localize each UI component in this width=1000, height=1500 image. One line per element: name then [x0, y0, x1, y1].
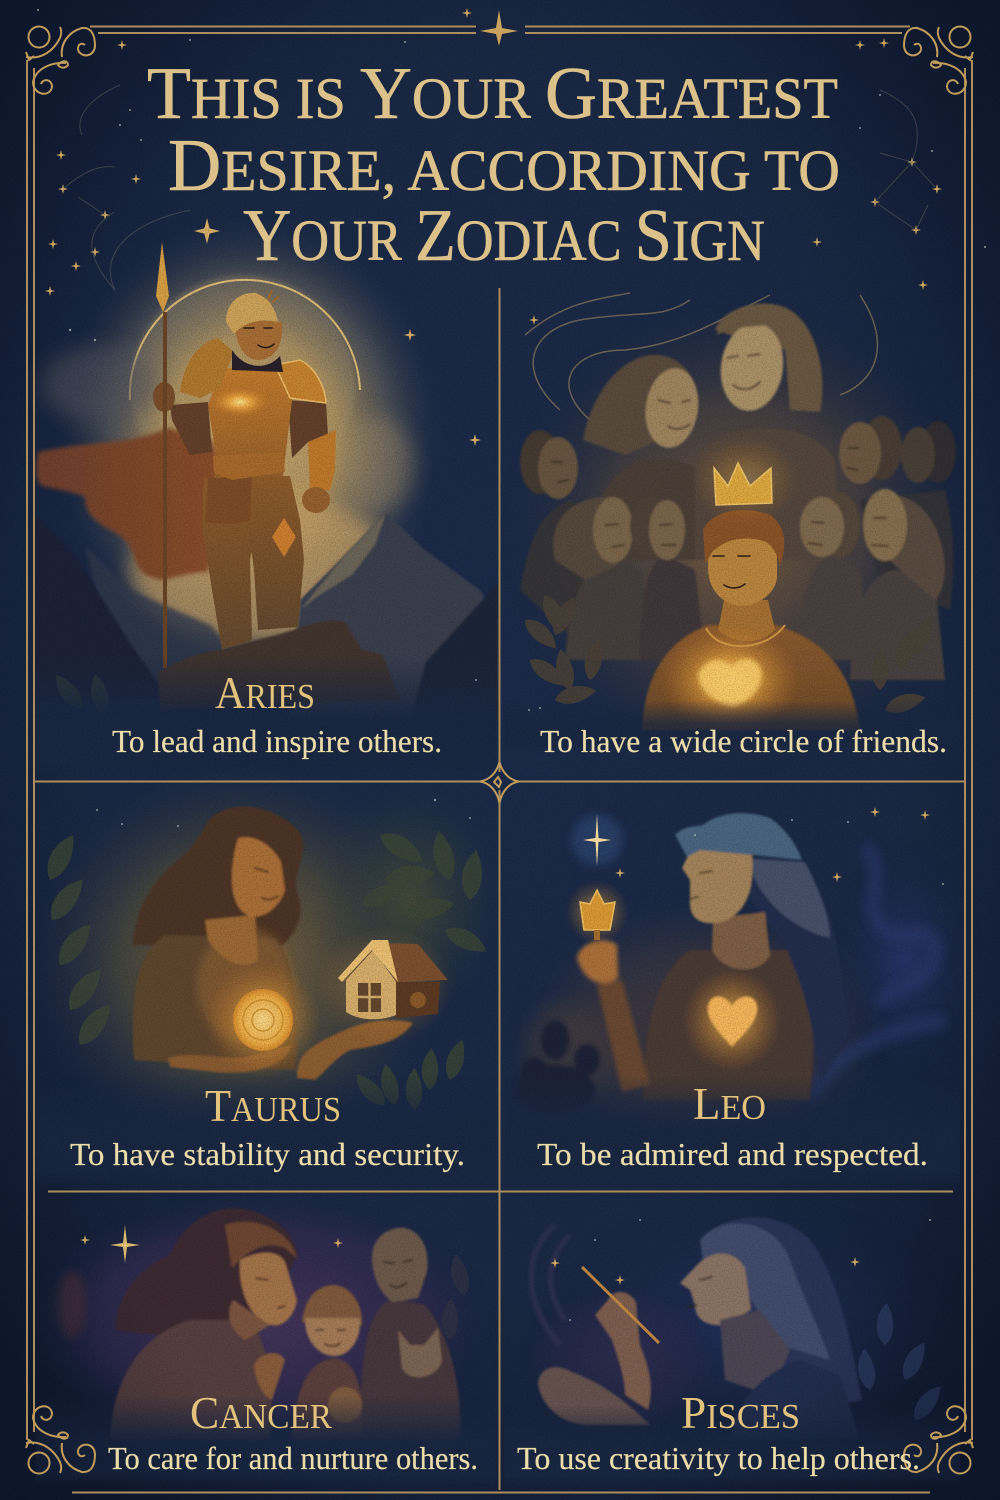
bottom fade — [505, 1405, 960, 1487]
palette fish — [538, 1367, 650, 1425]
centre diamond ornament — [480, 762, 519, 803]
label: Taurus: TAURUS — [205, 1080, 341, 1131]
label: Leo: To be admired and respected. — [537, 1136, 928, 1172]
label: Leo: LEO — [693, 1078, 766, 1129]
red leaves — [58, 1271, 86, 1339]
lower heads — [553, 489, 945, 600]
haze — [525, 840, 985, 1125]
icon: star — [571, 814, 623, 866]
spear — [156, 242, 169, 668]
corner ornament top left — [26, 26, 95, 94]
background bodies — [520, 428, 953, 680]
panel: Cancer — [25, 1190, 496, 1487]
figure in hat — [643, 813, 850, 1100]
label: Aries: ARIES — [215, 667, 315, 718]
crowd of friends — [520, 304, 956, 680]
label: Pisces: PISCES — [681, 1387, 800, 1438]
warrior cape — [36, 428, 226, 580]
corner ornament bottom right — [904, 1406, 973, 1474]
legs — [202, 476, 304, 650]
label: Cancer — [108, 1387, 478, 1476]
title — [147, 53, 840, 277]
bottom fade — [505, 1075, 960, 1187]
woman top — [583, 355, 703, 455]
panel: Taurus — [25, 760, 505, 1187]
right leaves — [440, 1252, 471, 1341]
violet glow — [520, 1190, 950, 1450]
crowned friend — [642, 510, 860, 735]
side heads — [520, 416, 956, 499]
crowd silhouette — [515, 1020, 600, 1115]
panel: friends — [500, 293, 970, 775]
woman in profile — [680, 1217, 862, 1440]
woman — [110, 1208, 297, 1440]
icon: glowing coin — [205, 962, 321, 1078]
warm glow — [500, 295, 970, 775]
corner ornament bottom left — [26, 1406, 95, 1474]
label: Aries: To lead and inspire others. — [112, 723, 442, 759]
panel: Pisces — [505, 1190, 960, 1487]
head and helmet — [226, 290, 283, 372]
bottom fade — [505, 700, 960, 748]
label: Pisces: To use creativity to help others. — [517, 1440, 920, 1476]
icon: crown — [690, 435, 800, 525]
bottom fade — [36, 655, 496, 780]
icon: glowing heart — [682, 968, 782, 1072]
label: Cancer: CANCER — [190, 1387, 333, 1438]
top centre star — [480, 10, 518, 46]
leaves lower left — [50, 670, 111, 717]
label: Taurus — [70, 1080, 465, 1172]
hand with brush — [582, 1267, 659, 1410]
warrior figure — [153, 290, 336, 650]
label: Leo — [537, 1078, 928, 1172]
family figures — [110, 1208, 460, 1440]
swirl — [531, 1225, 570, 1345]
label: Aries — [112, 667, 442, 759]
corner ornament top right — [904, 26, 973, 94]
title: YOUR ZODIAC SIGN — [243, 195, 765, 277]
halo glow behind warrior — [55, 215, 445, 665]
warm glow — [25, 760, 505, 1160]
bottom fade — [36, 1395, 496, 1487]
rock under warrior — [158, 620, 400, 710]
arm with hand — [577, 940, 650, 1092]
icon: house — [315, 925, 455, 1045]
star — [110, 1225, 140, 1263]
title: DESIRE, ACCORDING TO — [168, 125, 840, 207]
stars field — [45, 8, 942, 1285]
bottom fade — [36, 1075, 496, 1187]
man and cat — [360, 1228, 460, 1440]
man top — [715, 304, 822, 415]
torso and arms — [153, 338, 336, 513]
icon: crown scepter — [565, 880, 629, 944]
child — [292, 1285, 363, 1440]
leaves — [520, 592, 939, 716]
leaves — [856, 1302, 947, 1424]
constellation lines — [63, 85, 935, 290]
title: THIS IS YOUR GREATEST — [147, 53, 838, 135]
woman — [133, 807, 413, 1080]
label: Taurus: To have stability and security. — [70, 1136, 465, 1172]
blue swirl — [812, 845, 945, 1100]
label: Cancer: To care for and nurture others. — [108, 1440, 478, 1476]
wisps — [525, 293, 877, 420]
leaves — [40, 825, 491, 1111]
distant mountains — [36, 513, 498, 720]
clouds — [42, 347, 413, 513]
label: Pisces — [517, 1387, 920, 1476]
label: friends: To have a wide circle of friends. — [540, 723, 947, 759]
panel: Aries warrior — [36, 215, 498, 780]
purple glow — [25, 1190, 495, 1450]
panel: Leo — [505, 813, 985, 1187]
